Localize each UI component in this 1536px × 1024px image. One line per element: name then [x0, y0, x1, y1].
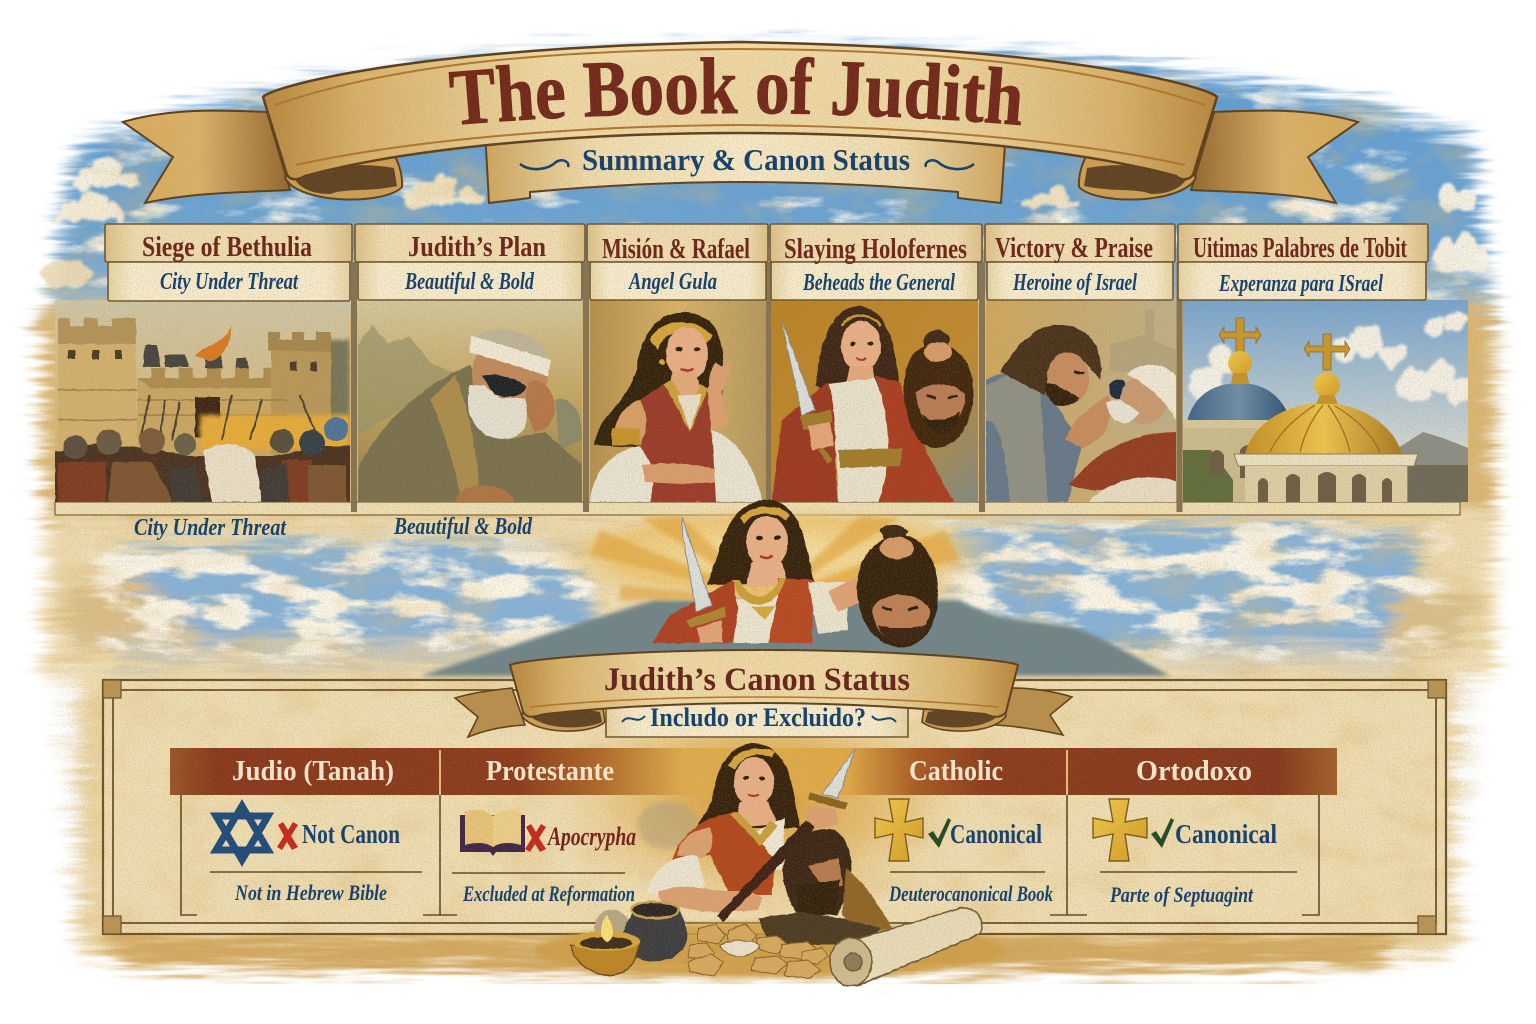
heading: Judith’s Canon Status	[604, 662, 910, 698]
sub ribbon	[606, 697, 908, 737]
left curl shadow	[293, 165, 397, 194]
note: Parte of Septuagint	[1109, 882, 1254, 907]
centre glow	[545, 680, 975, 920]
panel: victory and praise	[984, 224, 1178, 504]
frame corners	[103, 680, 1446, 934]
status: Apocrypha	[546, 822, 636, 851]
title banner	[120, 40, 1360, 204]
Judith figure	[707, 500, 815, 585]
column: Judio	[210, 755, 422, 905]
panel: canon status	[102, 678, 1448, 936]
table header bar	[170, 748, 1337, 795]
frame	[103, 680, 1446, 934]
illustration: Judith portrait	[588, 298, 768, 504]
flourish right	[926, 160, 974, 169]
column heading: Protestante	[486, 755, 614, 787]
right tail	[995, 688, 1072, 735]
left ribbon tail	[123, 111, 290, 203]
header plaque	[770, 224, 982, 262]
right scroll curl	[1079, 150, 1196, 200]
subheading: Beheads the General	[802, 270, 955, 296]
dagger	[822, 748, 856, 798]
left tail	[455, 688, 525, 737]
icon: red cross mark	[277, 822, 298, 850]
illustration: old man with bandage and eye patch	[355, 298, 585, 504]
title	[452, 113, 1022, 125]
subheading: Angel Gula	[627, 269, 717, 295]
status: Not Canon	[302, 819, 400, 849]
column: Ortodoxo	[1093, 755, 1297, 907]
severed head	[857, 535, 938, 647]
subheading: Includo or Excluido?	[650, 703, 866, 732]
note: Deuterocanonical Book	[888, 881, 1053, 906]
icon: red cross mark	[525, 824, 546, 852]
column heading: Judio (Tanah)	[232, 755, 394, 787]
subtitle ribbon	[485, 130, 1006, 203]
header plaque	[355, 224, 585, 262]
column heading: Catholic	[909, 755, 1003, 787]
orb behind lamp	[594, 910, 630, 946]
panel posts	[354, 262, 1180, 512]
heading: Siege of Bethulia	[142, 232, 312, 263]
ground wash	[535, 922, 1005, 978]
left curl	[522, 700, 605, 731]
caption: beautiful and bold: Beautiful & Bold	[393, 514, 533, 540]
main ribbon	[263, 42, 1217, 179]
sub-header plaque	[358, 262, 582, 300]
severed head	[783, 829, 851, 915]
sub-header plaque	[987, 262, 1173, 300]
ribbon inner line	[530, 697, 998, 707]
column heading: Ortodoxo	[1136, 755, 1252, 787]
sub-header plaque	[771, 262, 978, 300]
column: Protestante	[452, 755, 636, 906]
smoke	[638, 801, 698, 849]
left scroll curl	[285, 150, 402, 200]
header plaque	[985, 224, 1175, 262]
icon: check mark	[1151, 818, 1174, 848]
canon banner	[455, 650, 1072, 737]
icon: gold cross	[875, 799, 923, 861]
bowl	[720, 940, 760, 956]
icon: check mark	[928, 818, 951, 848]
status: Canonical	[950, 819, 1042, 849]
note: Excluded at Reformation	[462, 881, 635, 906]
subheading: City Under Threat	[160, 269, 299, 295]
caption: city under threat: City Under Threat	[134, 515, 287, 541]
subheading: Beautiful & Bold	[404, 269, 535, 295]
scroll	[833, 908, 982, 986]
header plaque	[105, 224, 352, 262]
Judith	[697, 743, 800, 828]
illustration: healing the old man's eye	[984, 298, 1178, 504]
flame	[601, 915, 613, 942]
subheading: Heroine of Israel	[1012, 270, 1137, 296]
oil lamp	[570, 940, 640, 975]
right ribbon tail	[1191, 111, 1358, 203]
column dividers	[181, 795, 1319, 915]
flourish right	[872, 716, 896, 722]
ribbon inner lines	[275, 49, 1205, 165]
sub-header plaque	[108, 262, 350, 301]
left curl shadow	[530, 709, 602, 727]
icon: star of David	[216, 806, 268, 860]
sub-header plaque	[590, 262, 766, 300]
right curl shadow	[1084, 165, 1188, 194]
heading: Slaying Holofernes	[784, 234, 967, 265]
strip under story panels	[55, 502, 1460, 515]
header plaque	[587, 224, 768, 262]
central illustration: Judith with sunburst and mountains	[420, 500, 1170, 676]
heading: Uitimas Palabres de Tobit	[1193, 233, 1407, 264]
status: Canonical	[1175, 819, 1277, 849]
ribbon	[510, 650, 1018, 717]
column: Catholic	[875, 755, 1053, 906]
heading: Misión & Rafael	[602, 234, 750, 265]
subheading: Experanza para ISrael	[1218, 271, 1383, 297]
flourish left	[520, 160, 568, 169]
heading: Victory & Praise	[995, 233, 1153, 264]
sub-header plaque	[1178, 262, 1426, 300]
icon: gold cross	[1093, 799, 1147, 861]
flourish left	[622, 716, 645, 722]
illustration: domed churches	[1183, 300, 1475, 502]
right curl	[922, 700, 1006, 731]
right curl shadow	[925, 709, 998, 727]
icon: open book	[460, 810, 525, 856]
stones	[688, 924, 828, 978]
heading: Judith’s Plan	[408, 232, 546, 263]
note: Not in Hebrew Bible	[234, 880, 387, 905]
illustration: walled city and soldiers	[55, 300, 350, 502]
pot	[622, 904, 687, 961]
inner frame line	[113, 690, 1436, 923]
panel: last words of Tobit	[1178, 224, 1475, 502]
title banner: The Book of Judith	[448, 56, 1021, 126]
panel: mission and Raphael	[587, 224, 768, 504]
bottom illustration: Judith, head, lamp, pot, stones and scroll	[535, 743, 1005, 986]
sunburst	[540, 505, 1010, 605]
panel: Judith's plan	[355, 224, 585, 504]
header plaque	[1178, 224, 1428, 262]
mountains	[420, 600, 1170, 676]
panel: slaying Holofernes	[769, 224, 982, 504]
illustration: Judith holding sword and head	[769, 298, 980, 504]
subtitle: Summary & Canon Status	[582, 142, 910, 177]
panel: siege of Bethulia	[55, 223, 353, 502]
